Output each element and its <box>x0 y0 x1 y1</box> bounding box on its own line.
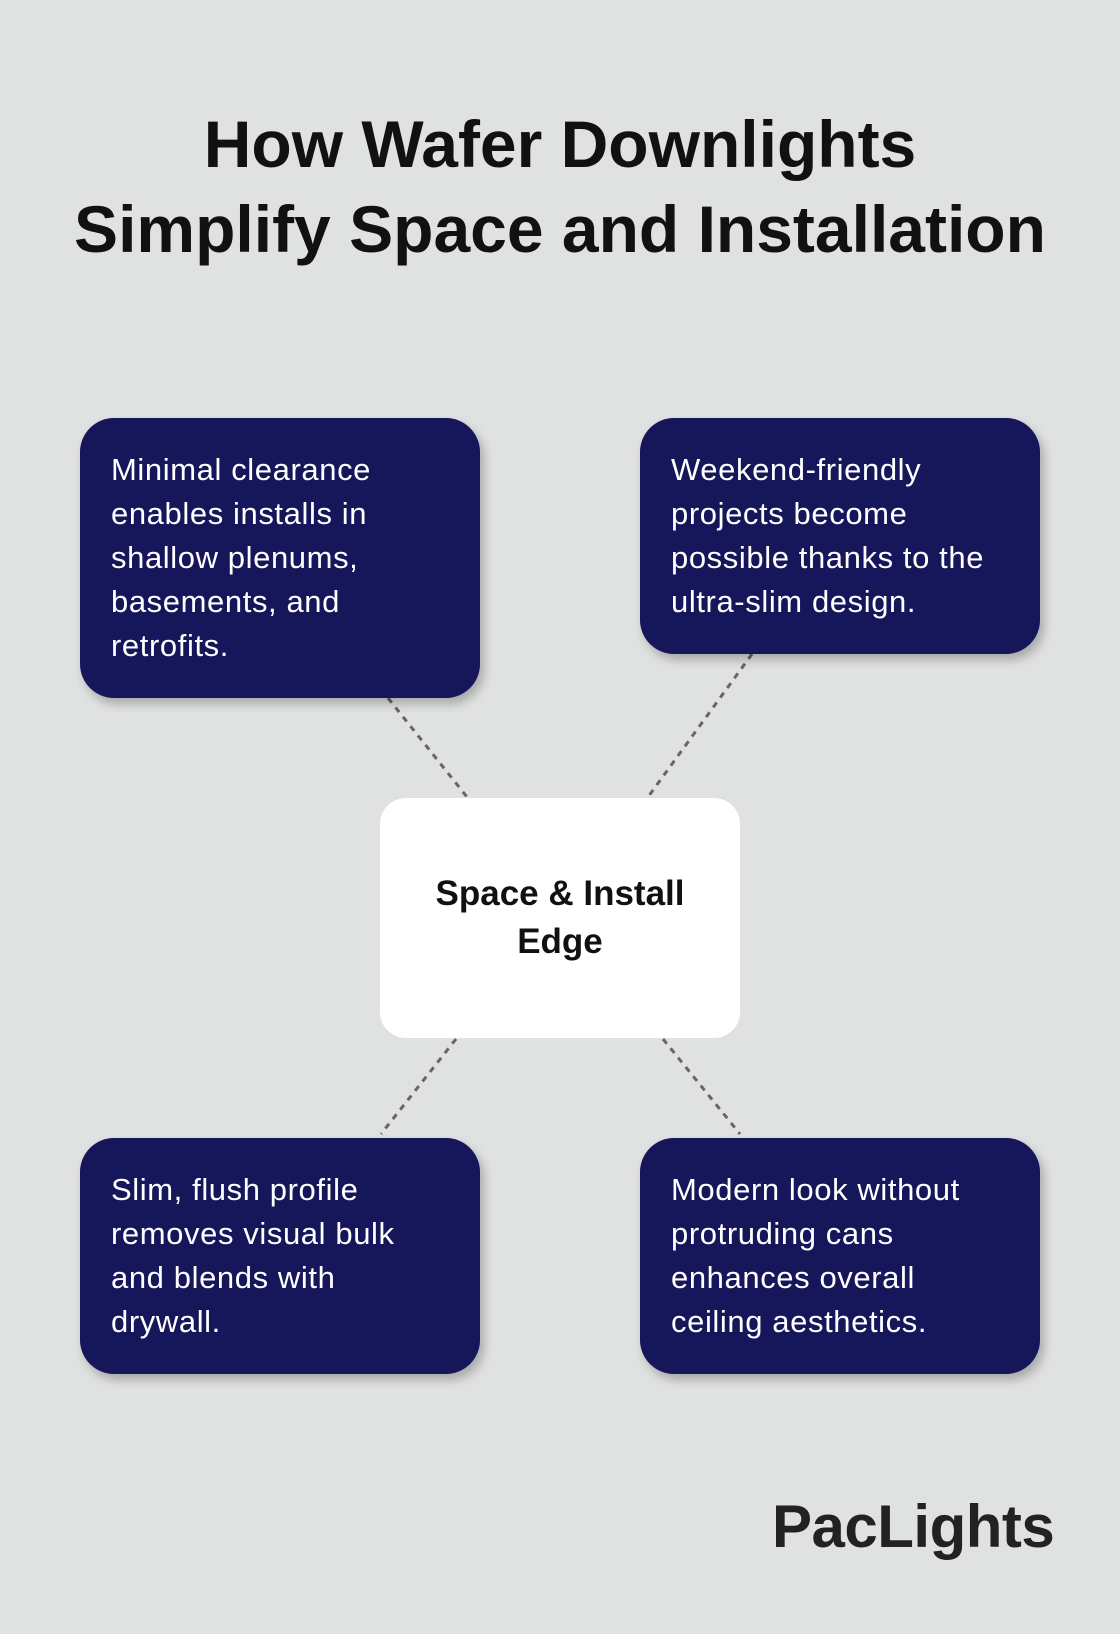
panel: bottom-right: ceiling aesthetics. <box>671 1304 927 1339</box>
panel: bottom-left: and blends with <box>111 1260 335 1295</box>
panel: top-right <box>640 418 1040 654</box>
panel: top-left: shallow plenums, <box>111 540 358 575</box>
panel: bottom-left: Slim, flush profile <box>111 1172 358 1207</box>
panel: bottom-left: drywall. <box>111 1304 221 1339</box>
panel: bottom-left <box>80 1138 480 1374</box>
center node <box>380 798 740 1038</box>
panel: bottom-right: protruding cans <box>671 1216 894 1251</box>
panel: bottom-right: enhances overall <box>671 1260 915 1295</box>
panel: top-left: basements, and <box>111 584 340 619</box>
logo: PacLights <box>772 1493 1054 1560</box>
panel: top-left: Minimal clearance <box>111 452 371 487</box>
title: Simplify Space and Installation <box>74 192 1046 266</box>
panel: top-right: ultra-slim design. <box>671 584 916 619</box>
title <box>74 107 1046 266</box>
panel: bottom-left: removes visual bulk <box>111 1216 395 1251</box>
center node: Space & Install <box>436 874 684 913</box>
panel: top-right: possible thanks to the <box>671 540 984 575</box>
panel: top-right: projects become <box>671 496 907 531</box>
title: How Wafer Downlights <box>204 107 916 181</box>
panel: top-right: Weekend-friendly <box>671 452 921 487</box>
panel: bottom-right <box>640 1138 1040 1374</box>
center node: Edge <box>517 922 603 961</box>
panel: top-left: enables installs in <box>111 496 367 531</box>
panel: bottom-right: Modern look without <box>671 1172 960 1207</box>
panel: top-left <box>80 418 480 698</box>
panel: top-left: retrofits. <box>111 628 229 663</box>
